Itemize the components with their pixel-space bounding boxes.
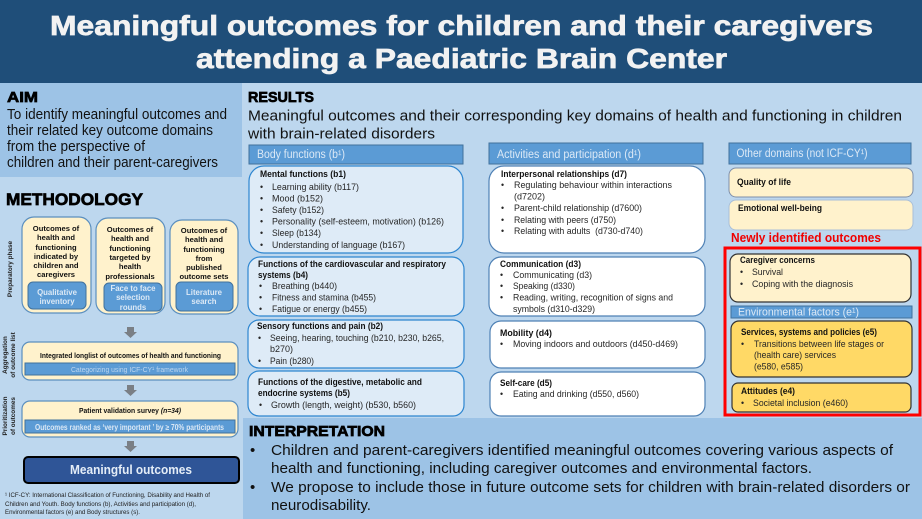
card: services, systems and policies: Transitions between life stages or [754, 339, 884, 349]
card: health professionals: Face to face [110, 284, 156, 293]
card: communication: Communicating (d3) [513, 270, 592, 280]
card: patient validation survey [22, 401, 238, 437]
card: mental functions: Safety (b152) [272, 205, 324, 215]
card: published outcome sets: from [196, 254, 213, 263]
results heading [247, 89, 902, 142]
card: published outcome sets: search [191, 297, 217, 306]
card: integrated longlist: Integrated longlist of outcomes of health and functioning [40, 351, 221, 360]
card: cardiovascular and respiratory: Fitness and stamina (b455) [272, 292, 376, 302]
card: attitudes: Attitudes (e4) [741, 386, 795, 396]
card: interpersonal relationships: Relating with peers (d750) [514, 215, 616, 225]
card: mental functions [249, 166, 463, 253]
card: caregiver concerns: Survival [752, 267, 783, 277]
card: emotional well-being [729, 200, 913, 230]
card: children and caregivers: inventory [39, 297, 75, 306]
card: published outcome sets: health and [185, 235, 223, 244]
card: interpersonal relationships: Regulating behaviour within interactions [514, 180, 673, 190]
label: prioritization of outcomes [2, 396, 17, 436]
card: caregiver concerns: Coping with the diagnosis [752, 279, 854, 289]
panel: interpretation: • [250, 442, 255, 459]
card: mobility: Mobility (d4) [500, 328, 552, 338]
card: services, systems and policies [731, 321, 912, 377]
card: cardiovascular and respiratory: • [259, 281, 262, 291]
column header: other domains [729, 143, 911, 164]
card: published outcome sets [170, 220, 238, 314]
card: sensory functions: • [258, 333, 261, 343]
card: mental functions: Mental functions (b1) [260, 169, 346, 179]
arrow: to longlist [124, 327, 137, 338]
card: interpersonal relationships [489, 166, 705, 253]
card: published outcome sets: outcome sets [180, 272, 228, 281]
card: emotional well-being: Emotional well-being [738, 203, 822, 213]
card: children and caregivers: caregivers [37, 270, 75, 279]
card: children and caregivers: children and [33, 261, 79, 270]
card: children and caregivers: functioning [35, 243, 77, 252]
panel: interpretation [243, 418, 922, 519]
card: interpersonal relationships: Relating with adults (d730-d740) [514, 226, 643, 236]
card: integrated longlist: Categorizing using ICF-CY¹ framework [71, 365, 188, 374]
column header: activities and participation: Activities and participation (d¹) [497, 149, 641, 161]
card: children and caregivers [22, 217, 91, 313]
panel: aim: their related key outcome domains [7, 122, 213, 139]
card: patient validation survey: Outcomes ranked as ‘very important ’ by ≥ 70% participants [35, 423, 225, 432]
card: interpersonal relationships: • [501, 226, 504, 236]
card: health professionals [96, 218, 165, 314]
card: cardiovascular and respiratory: Breathing (b440) [272, 281, 337, 291]
card: interpersonal relationships: • [501, 203, 504, 213]
panel: aim: from the perspective of [7, 138, 146, 155]
card: digestive, metabolic and endocrine: Functions of the digestive, metabolic and [258, 377, 422, 387]
card: mental functions: • [260, 194, 263, 204]
card: published outcome sets: Outcomes of [181, 226, 228, 235]
card: cardiovascular and respiratory [248, 257, 464, 316]
card: mobility: Moving indoors and outdoors (d450-d469) [513, 339, 678, 349]
header: environmental factors [731, 306, 912, 318]
box: meaningful outcomes [24, 457, 239, 483]
card: caregiver concerns: • [740, 267, 743, 277]
card: children and caregivers: Qualitative [37, 288, 78, 297]
card: services, systems and policies: (e580, e585) [754, 362, 803, 372]
card: patient validation survey: Patient validation survey (n=34) [79, 406, 181, 415]
card: attitudes: • [741, 398, 744, 408]
card: self-care: Eating and drinking (d550, d560) [513, 389, 639, 399]
card: sensory functions: b270) [270, 344, 293, 354]
card: mental functions: Sleep (b134) [272, 228, 321, 238]
card: published outcome sets: Literature [186, 288, 223, 297]
card: health professionals: functioning [109, 244, 151, 253]
card: health professionals: professionals [105, 272, 155, 281]
panel: interpretation: • [250, 479, 255, 496]
card: communication [489, 257, 705, 316]
card: integrated longlist [22, 342, 238, 380]
card: mental functions: Mood (b152) [272, 194, 323, 204]
card: digestive, metabolic and endocrine: endocrine systems (b5) [258, 388, 350, 398]
card: attitudes [732, 383, 911, 412]
panel: aim [0, 83, 242, 177]
card: mental functions: Learning ability (b117) [272, 182, 359, 192]
card: mobility [490, 321, 705, 368]
panel: interpretation: health and functioning, including caregiver outcomes and environmental factors. [271, 460, 812, 477]
label: aggregation of outcome list [2, 331, 17, 378]
label: aggregation of outcome list: Aggregation [2, 336, 9, 374]
card: cardiovascular and respiratory: systems (b4) [258, 270, 308, 280]
card: health professionals: selection [116, 293, 150, 302]
card: communication: Speaking (d330) [513, 281, 575, 291]
card: cardiovascular and respiratory: • [259, 292, 262, 302]
footnote: Children and Youth. Body functions (b), Activities and participation (d), [5, 501, 196, 508]
column header: body functions [249, 145, 463, 164]
card: children and caregivers: Outcomes of [33, 224, 80, 233]
arrow: to survey [124, 385, 137, 396]
card: children and caregivers: health and [37, 233, 75, 242]
results heading: RESULTS [248, 89, 314, 106]
panel: interpretation: We propose to include those in future outcome sets for children with brain-related disorders or [271, 479, 910, 496]
card: services, systems and policies: Services, systems and policies (e5) [741, 327, 877, 337]
card: self-care: • [500, 389, 503, 399]
card: published outcome sets: published [186, 263, 222, 272]
card: caregiver concerns: Caregiver concerns [740, 255, 815, 265]
label: prioritization of outcomes: of outcomes [10, 397, 17, 435]
title banner: attending a Paediatric Brain Center [196, 43, 727, 74]
card: interpersonal relationships: Interpersonal relationships (d7) [501, 169, 627, 179]
panel: interpretation: INTERPRETATION [249, 423, 385, 440]
card: health professionals: health [119, 262, 142, 271]
card: communication: symbols (d310-d329) [513, 304, 595, 314]
card: health professionals: rounds [120, 303, 147, 312]
heading: newly identified outcomes: Newly identified outcomes [731, 231, 881, 245]
card: health professionals: targeted by [110, 253, 151, 262]
card: communication: Reading, writing, recognition of signs and [513, 292, 673, 302]
card: cardiovascular and respiratory: Fatigue or energy (b455) [272, 304, 367, 314]
footnote: ¹ ICF-CY: International Classification of Functioning, Disability and Health of [5, 492, 210, 499]
card: communication: • [500, 281, 503, 291]
card: self-care: Self-care (d5) [500, 378, 552, 388]
panel: interpretation: Children and parent-caregivers identified meaningful outcomes covering various aspects of [271, 442, 894, 459]
card: quality of life: Quality of life [737, 177, 791, 187]
card: attitudes: Societal inclusion (e460) [753, 398, 848, 408]
title banner [0, 0, 922, 83]
card: cardiovascular and respiratory: • [259, 304, 262, 314]
highlight frame: newly identified outcomes [725, 248, 920, 415]
card: digestive, metabolic and endocrine [248, 371, 464, 416]
panel: aim: children and their parent-caregivers [7, 154, 218, 171]
column header: body functions: Body functions (b¹) [257, 149, 345, 161]
card: sensory functions [248, 320, 464, 368]
card: quality of life [729, 168, 913, 197]
column header: activities and participation [489, 143, 703, 164]
methodology heading: METHODOLOGY [6, 190, 144, 209]
card: services, systems and policies: (health care) services [754, 350, 837, 360]
card: mental functions: • [260, 228, 263, 238]
card: interpersonal relationships: • [501, 180, 504, 190]
panel: methodology [2, 190, 239, 516]
card: mental functions: • [260, 216, 263, 226]
label: aggregation of outcome list: of outcome list [10, 331, 17, 378]
card: self-care [490, 372, 705, 416]
arrow: to meaningful outcomes [124, 441, 137, 452]
card: mental functions: • [260, 182, 263, 192]
title banner: Meaningful outcomes for children and their caregivers [50, 10, 873, 41]
results heading: Meaningful outcomes and their corresponding key domains of health and functioning in children [248, 108, 902, 124]
panel: aim: AIM [7, 89, 38, 106]
card: communication: Communication (d3) [500, 259, 581, 269]
card: sensory functions: • [258, 356, 261, 366]
card: health professionals: Outcomes of [107, 225, 154, 234]
card: sensory functions: Seeing, hearing, touching (b210, b230, b265, [270, 333, 444, 343]
footnote: Environmental factors (e) and Body structures (s). [5, 509, 140, 516]
card: mental functions: • [260, 240, 263, 250]
card: interpersonal relationships: Parent-child relationship (d7600) [514, 203, 642, 213]
card: communication: • [500, 292, 503, 302]
card: services, systems and policies: • [741, 339, 744, 349]
card: cardiovascular and respiratory: Functions of the cardiovascular and respiratory [258, 259, 446, 269]
panel: results [247, 89, 920, 416]
box: meaningful outcomes: Meaningful outcomes [70, 462, 192, 477]
card: sensory functions: Sensory functions and pain (b2) [257, 321, 383, 331]
card: children and caregivers: indicated by [34, 252, 79, 261]
label: prioritization of outcomes: Prioritization [2, 396, 9, 436]
card: digestive, metabolic and endocrine: • [259, 400, 262, 410]
results heading: with brain-related disorders [247, 126, 435, 142]
card: health professionals: health and [111, 234, 149, 243]
panel: interpretation: neurodisability. [271, 497, 371, 514]
header: environmental factors: Environmental factors (e¹) [738, 306, 859, 318]
card: interpersonal relationships: • [501, 215, 504, 225]
card: sensory functions: Pain (b280) [270, 356, 314, 366]
label: preparatory phase: Preparatory phase [7, 240, 14, 297]
card: published outcome sets: functioning [183, 245, 225, 254]
card: mental functions: Understanding of language (b167) [272, 240, 405, 250]
card: mobility: • [500, 339, 503, 349]
column header: other domains: Other domains (not ICF-CY¹) [736, 148, 868, 160]
footnote [5, 492, 210, 516]
card: mental functions: Personality (self-esteem, motivation) (b126) [272, 216, 444, 226]
card: caregiver concerns: • [740, 279, 743, 289]
card: interpersonal relationships: (d7202) [514, 192, 545, 202]
card: communication: • [500, 270, 503, 280]
card: digestive, metabolic and endocrine: Growth (length, weight) (b530, b560) [271, 400, 416, 410]
card: mental functions: • [260, 205, 263, 215]
panel: aim: To identify meaningful outcomes and [7, 106, 227, 123]
card: caregiver concerns [730, 254, 911, 302]
